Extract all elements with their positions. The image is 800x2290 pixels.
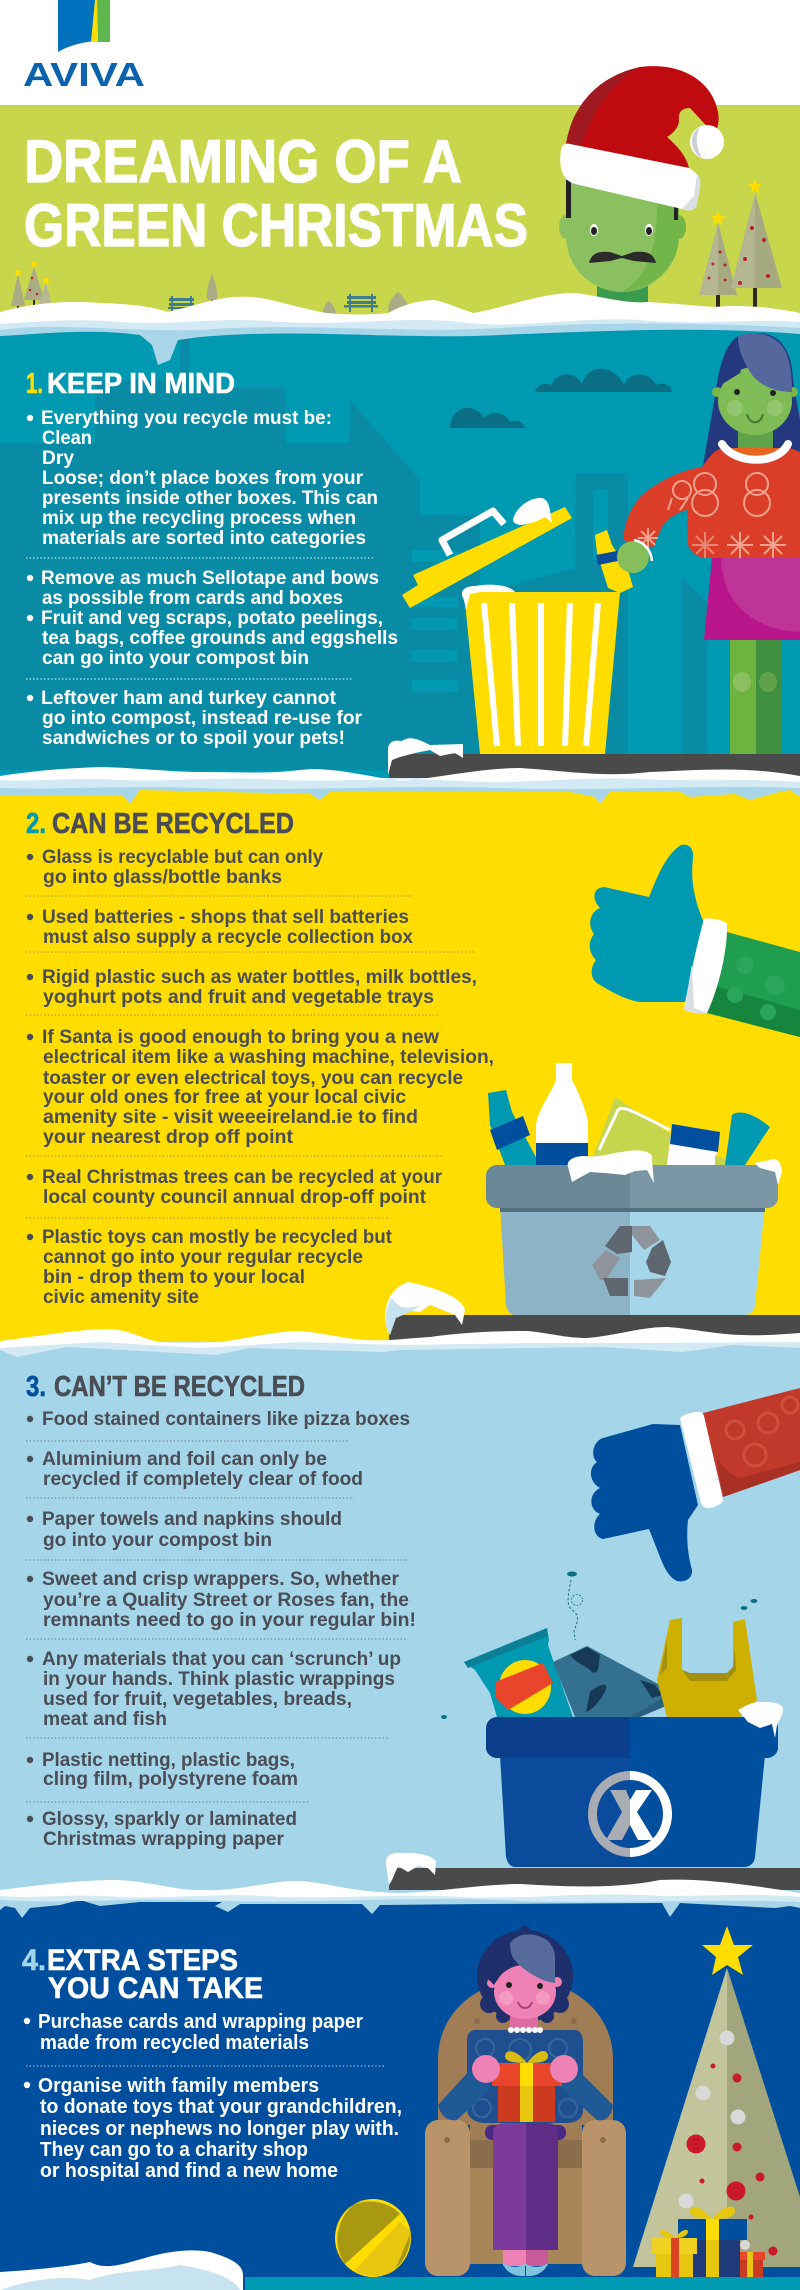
text: batteries: must also supply a recycle collection box xyxy=(43,927,413,948)
text: everything you recycle: Loose; don’t place boxes from your xyxy=(42,468,364,489)
text: paper towels: go into your compost bin xyxy=(43,1530,272,1551)
text: glass xyxy=(27,847,323,888)
title: DREAMING OF A xyxy=(24,128,462,195)
heading: 3. xyxy=(26,1371,46,1403)
illustration: ball xyxy=(335,2199,411,2277)
text: electrical items: your nearest drop off point xyxy=(43,1127,294,1148)
text: everything you recycle: Clean xyxy=(42,428,92,449)
illustration: snow mound xyxy=(0,2250,243,2290)
illustration: trees right xyxy=(699,179,782,309)
text: everything you recycle: presents inside other boxes. This can xyxy=(42,488,378,509)
text: electrical items: your old ones for free at your local civic xyxy=(43,1087,406,1108)
text: plastic toys: civic amenity site xyxy=(43,1287,199,1308)
text: rigid plastic: yoghurt pots and fruit and vegetable trays xyxy=(43,987,434,1008)
text: everything you recycle: mix up the recycling process when xyxy=(42,508,356,529)
text: batteries xyxy=(27,907,413,948)
text: glass: go into glass/bottle banks xyxy=(43,867,282,888)
text: electrical items: electrical item like a washing machine, television, xyxy=(43,1047,494,1068)
heading: 1. xyxy=(26,368,43,400)
text: wrappers: remnants need to go in your regular bin! xyxy=(43,1610,416,1631)
text: paper towels xyxy=(27,1509,342,1551)
sweater pattern xyxy=(638,473,786,558)
text: everything you recycle: Dry xyxy=(42,448,74,469)
text: paper towels: Paper towels and napkins should xyxy=(42,1509,342,1530)
text: sellotape and compost: tea bags, coffee grounds and eggshells xyxy=(42,628,398,649)
text: leftovers: sandwiches or to spoil your pets! xyxy=(42,728,345,749)
divider: snow 3 xyxy=(0,1327,800,1357)
text: electrical items xyxy=(27,1027,494,1148)
text: plastic netting: cling film, polystyrene foam xyxy=(43,1769,298,1790)
illustration: waste in bin xyxy=(441,1572,758,1719)
icon: flies xyxy=(441,1572,758,1719)
icon: thumbs up xyxy=(590,845,800,1037)
text: scrunch: meat and fish xyxy=(43,1709,167,1730)
illustration: yellow bin xyxy=(402,498,620,754)
text: donate toys: or hospital and find a new home xyxy=(40,2160,338,2182)
text: wrappers: Sweet and crisp wrappers. So, whether xyxy=(42,1569,400,1590)
illustration: clouds xyxy=(450,369,672,428)
text: aluminium: Aluminium and foil can only be xyxy=(42,1449,327,1470)
icon: recycling symbol xyxy=(592,1226,671,1298)
text: electrical items: amenity site - visit weeeireland.ie to find xyxy=(43,1107,418,1128)
panel: 3 can't be recycled xyxy=(0,1345,800,1900)
text: glossy paper xyxy=(27,1809,297,1850)
text: leftovers: Leftover ham and turkey cannot xyxy=(41,688,337,709)
heading: KEEP IN MIND xyxy=(47,368,235,400)
illustration: ledge xyxy=(385,1282,800,1340)
text: leftovers: go into compost, instead re-use for xyxy=(42,708,363,729)
logo: Aviva: AVIVA xyxy=(23,56,145,93)
text: everything you recycle: materials are sorted into categories xyxy=(42,528,366,549)
text: sellotape and compost xyxy=(27,568,398,669)
text: sellotape and compost: Remove as much Sellotape and bows xyxy=(41,568,379,589)
text: glass: Glass is recyclable but can only xyxy=(42,847,323,868)
logo: Aviva xyxy=(23,0,145,93)
text: donate toys: nieces or nephews no longer play with. xyxy=(40,2118,399,2140)
text: aluminium xyxy=(27,1449,363,1490)
heading: EXTRA STEPS xyxy=(47,1944,238,1977)
text: donate toys xyxy=(24,2075,402,2182)
panel: 4 extra steps xyxy=(0,1897,800,2290)
text: cards and wrapping paper: Purchase cards and wrapping paper xyxy=(38,2011,363,2033)
text: glossy paper: Glossy, sparkly or laminated xyxy=(42,1809,297,1830)
text: everything you recycle: Everything you recycle must be: xyxy=(41,408,332,429)
title xyxy=(24,128,528,259)
text: glossy paper: Christmas wrapping paper xyxy=(43,1829,285,1850)
text: cards and wrapping paper xyxy=(24,2011,363,2054)
text: plastic netting xyxy=(27,1750,298,1790)
text: donate toys: They can go to a charity shop xyxy=(40,2139,308,2161)
text: plastic netting: Plastic netting, plastic bags, xyxy=(42,1750,295,1771)
heading xyxy=(22,1944,263,2005)
illustration: ledge xyxy=(388,738,800,780)
text: plastic toys: bin - drop them to your local xyxy=(43,1267,305,1288)
text: everything you recycle xyxy=(27,408,378,549)
text: leftovers xyxy=(27,688,363,749)
text: aluminium: recycled if completely clear of food xyxy=(43,1469,363,1490)
text: batteries: Used batteries - shops that sell batteries xyxy=(42,907,409,928)
text: food stained: Food stained containers like pizza boxes xyxy=(42,1409,410,1430)
illustration: man in Santa hat xyxy=(559,66,724,308)
text: donate toys: Organise with family members xyxy=(38,2075,319,2097)
text: sellotape and compost: can go into your compost bin xyxy=(42,648,309,669)
text: sellotape and compost: Fruit and veg scraps, potato peelings, xyxy=(41,608,383,629)
text: electrical items: If Santa is good enough to bring you a new xyxy=(42,1027,439,1048)
divider: snow 1 xyxy=(0,293,800,365)
text: electrical items: toaster or even electrical toys, you can recycle xyxy=(43,1068,463,1089)
text: christmas trees: local county council annual drop-off point xyxy=(43,1187,427,1208)
illustration: grandmother in armchair xyxy=(425,1926,626,2276)
panel: header xyxy=(0,66,800,330)
text: scrunch: used for fruit, vegetables, breads, xyxy=(43,1689,352,1710)
illustration: general waste bin xyxy=(486,1702,783,1867)
heading: CAN BE RECYCLED xyxy=(52,808,294,840)
text: donate toys: to donate toys that your grandchildren, xyxy=(40,2096,402,2118)
panel: 2 can be recycled xyxy=(0,785,800,1345)
title: GREEN CHRISTMAS xyxy=(24,192,528,259)
heading: CAN’T BE RECYCLED xyxy=(54,1371,305,1403)
illustration: benches and bushes xyxy=(168,274,409,316)
illustration: items in recycling bin xyxy=(488,1063,770,1165)
text: wrappers: you’re a Quality Street or Roses fan, the xyxy=(43,1590,409,1611)
text: cards and wrapping paper: made from recycled materials xyxy=(40,2032,309,2054)
illustration: city silhouette xyxy=(0,335,707,770)
text: sellotape and compost: as possible from cards and boxes xyxy=(42,588,343,609)
divider: snow 4 xyxy=(0,1880,800,1918)
text: rigid plastic: Rigid plastic such as water bottles, milk bottles, xyxy=(42,967,477,988)
illustration: small trees left xyxy=(11,261,52,310)
text: scrunch: Any materials that you can ‘scrunch’ up xyxy=(42,1649,401,1670)
text: plastic toys: Plastic toys can mostly be recycled but xyxy=(42,1227,393,1248)
text: christmas trees: Real Christmas trees can be recycled at your xyxy=(42,1167,443,1188)
heading: YOU CAN TAKE xyxy=(48,1972,263,2005)
text: scrunch: in your hands. Think plastic wrappings xyxy=(43,1669,395,1690)
illustration: recycling bin xyxy=(486,1150,782,1315)
text: plastic toys: cannot go into your regular recycle xyxy=(43,1247,363,1268)
text: rigid plastic xyxy=(27,967,477,1008)
panel: 1 keep in mind xyxy=(0,325,800,780)
text: plastic toys xyxy=(27,1227,393,1308)
icon: thumbs down xyxy=(591,1388,800,1581)
text: scrunch xyxy=(27,1649,401,1730)
text: christmas trees xyxy=(27,1167,443,1208)
illustration: ledge xyxy=(386,1853,800,1890)
heading: 4. xyxy=(22,1944,46,1977)
illustration: christmas tree with gifts xyxy=(633,1926,800,2277)
divider: snow 2 xyxy=(0,767,800,804)
text: wrappers xyxy=(27,1569,416,1631)
icon: X circle xyxy=(588,1771,672,1857)
illustration: woman with bottle xyxy=(595,333,800,754)
heading: 2. xyxy=(26,808,46,840)
